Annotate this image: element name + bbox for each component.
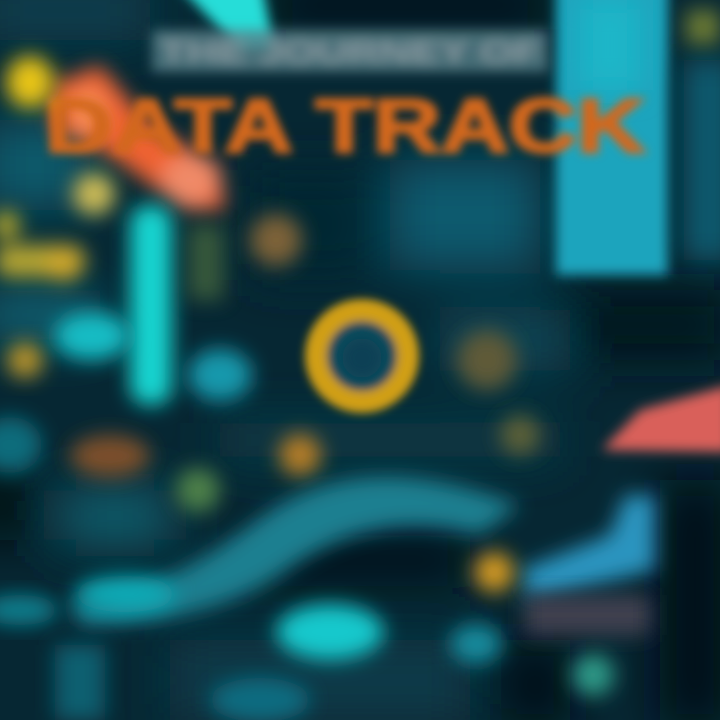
orange dot bottom bbox=[474, 552, 514, 592]
subtitle text: THE JOURNEY OF bbox=[160, 34, 540, 70]
left wave tail bbox=[0, 595, 58, 625]
green teal dot bottom right bbox=[572, 654, 614, 696]
top right small yellow mark bbox=[686, 10, 720, 44]
cyan horizontal bar bbox=[54, 312, 130, 360]
muted orange dot bbox=[250, 214, 302, 266]
column: large teal bbox=[556, 0, 668, 275]
olive vertical mark bbox=[188, 225, 224, 300]
small amber dot bbox=[7, 342, 43, 378]
large teal wave bbox=[70, 477, 520, 625]
bottom teal curve bbox=[210, 678, 310, 720]
ring centre bbox=[342, 338, 382, 378]
brown capsule left bbox=[70, 435, 150, 477]
bottom left column bbox=[55, 645, 105, 720]
blue ribbon right bbox=[520, 495, 655, 600]
left yellow cluster bbox=[0, 211, 85, 281]
top cyan beam bbox=[178, 0, 274, 48]
small teal ellipse bbox=[450, 624, 502, 664]
brown dot right of ring bbox=[457, 330, 517, 390]
column highlight bbox=[580, 0, 640, 90]
orange dot under ring bbox=[279, 434, 321, 476]
mauve bar right bbox=[525, 595, 650, 635]
column: right strip bbox=[684, 60, 720, 260]
orange swoosh behind title bbox=[50, 65, 225, 210]
left teal blob bbox=[0, 417, 42, 473]
cyan ellipse bottom bbox=[276, 604, 384, 660]
title: DATA TRACK bbox=[45, 84, 645, 169]
cyan vertical bar bbox=[130, 205, 172, 405]
red wedge right bbox=[602, 385, 720, 452]
pale yellow dot bbox=[73, 173, 115, 215]
green dot bbox=[176, 468, 220, 512]
right vertical columns bbox=[556, 0, 720, 275]
bright wave segment bbox=[75, 576, 175, 612]
central yellow ring bbox=[316, 310, 408, 402]
brown dot lower right bbox=[500, 415, 540, 455]
subtitle banner bbox=[152, 30, 548, 72]
yellow dot top left bbox=[6, 56, 54, 108]
teal blob bbox=[188, 349, 252, 401]
